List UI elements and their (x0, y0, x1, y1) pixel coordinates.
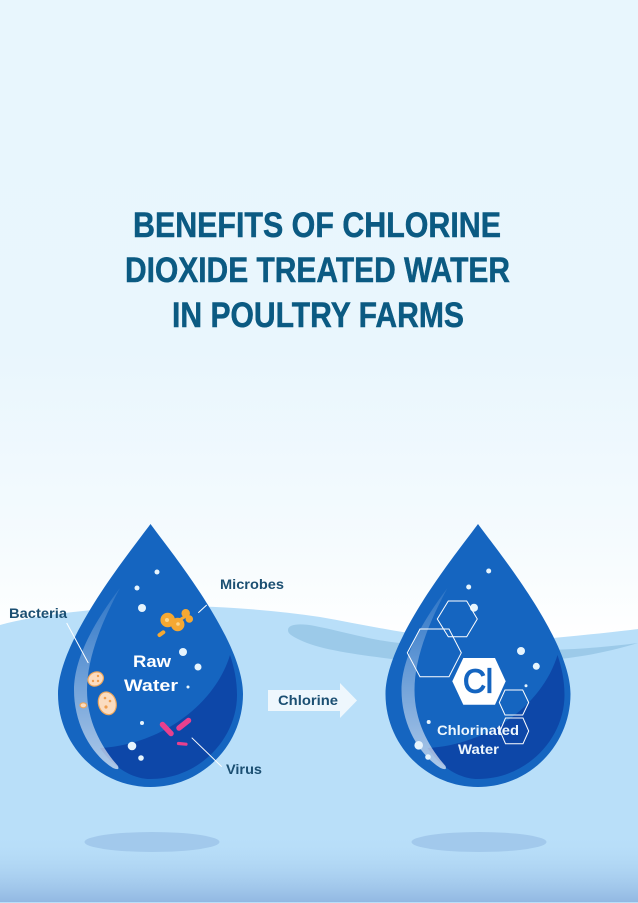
title: BENEFITS OF CHLORINE (133, 206, 501, 245)
chlorine symbol hexagon (452, 658, 506, 705)
drop body (386, 524, 570, 787)
label: virus: Virus (226, 762, 262, 777)
virus (162, 720, 188, 744)
raw water drop (58, 524, 243, 787)
outlined hexagons (407, 601, 529, 744)
microbes (160, 610, 192, 635)
chlorinated water drop (386, 524, 570, 787)
bubbles (414, 568, 540, 760)
drop shadow right (412, 832, 546, 852)
chlorine symbol hexagon: Cl (463, 663, 493, 700)
title: IN POULTRY FARMS (172, 296, 464, 335)
bottom gradient (0, 834, 638, 902)
highlight (402, 588, 448, 769)
leader lines (67, 605, 222, 767)
bubbles (128, 570, 202, 761)
highlight (74, 588, 120, 769)
drop shadow left (84, 832, 220, 852)
dark water fill (428, 655, 564, 779)
raw water label: Water (124, 677, 179, 695)
label: microbes: Microbes (220, 577, 284, 592)
raw water label (124, 653, 179, 695)
water surface (0, 606, 638, 903)
dark water fill (100, 655, 237, 779)
arrow: chlorine (268, 683, 357, 718)
chlorinated water label: Water (458, 742, 500, 757)
raw water label: Raw (133, 653, 171, 671)
background sky (0, 0, 638, 640)
title: DIOXIDE TREATED WATER (125, 251, 510, 290)
drop body (58, 524, 243, 787)
chlorinated water label: Chlorinated (437, 723, 519, 738)
wave shadow band (288, 624, 638, 663)
chlorinated water label (437, 723, 519, 757)
title (125, 206, 510, 335)
label: bacteria: Bacteria (9, 606, 68, 621)
arrow: chlorine: Chlorine (278, 693, 339, 708)
bacteria (80, 669, 119, 717)
